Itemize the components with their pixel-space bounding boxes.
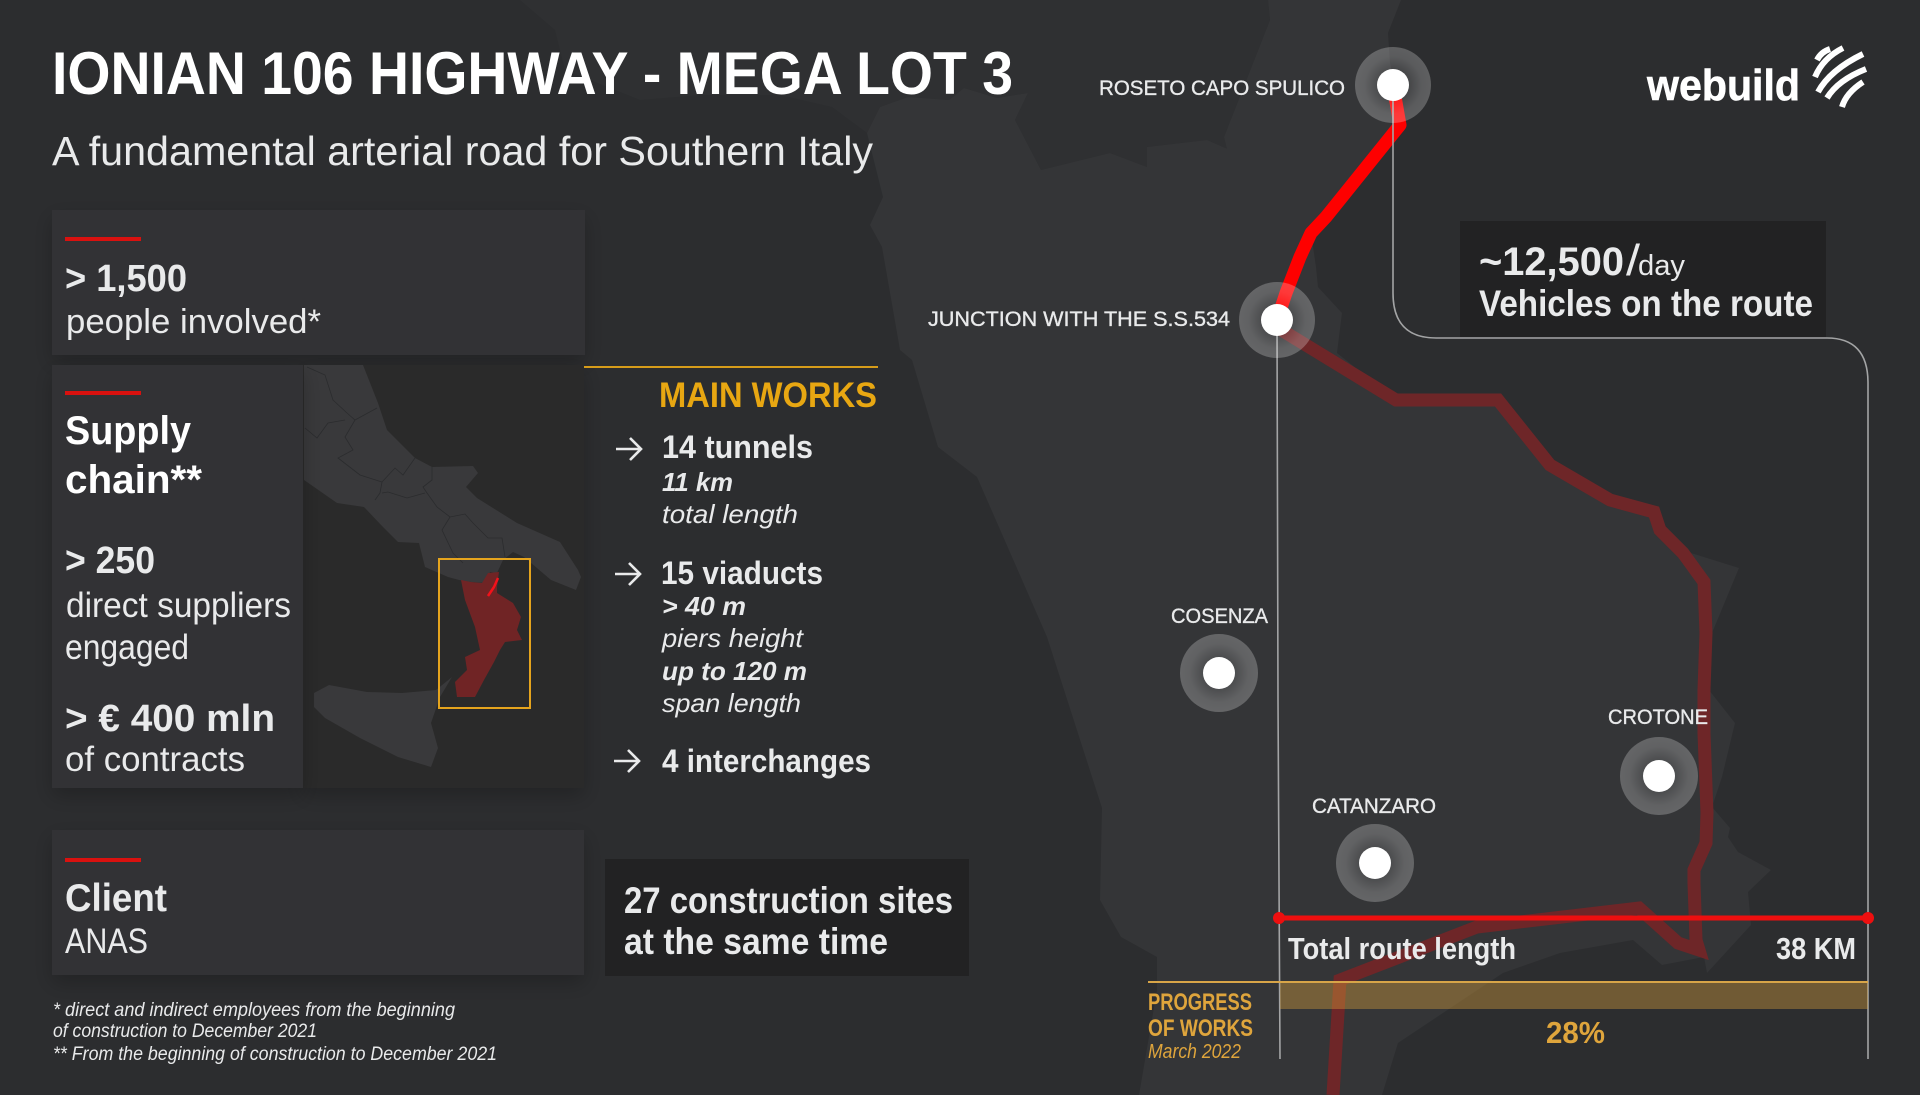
tunnels: 11 km (662, 467, 733, 497)
panel: supply chain text: of contracts (65, 740, 245, 779)
panel: supply chain text: chain** (65, 458, 202, 502)
callout: construction sites (605, 859, 969, 976)
tunnels: 14 tunnels (662, 429, 813, 465)
callout: construction sites: at the same time (624, 921, 888, 962)
subtitle: A fundamental arterial road for Southern Italy (52, 128, 873, 174)
route: bright section (1277, 85, 1400, 320)
viaducts: > 40 m (662, 591, 746, 621)
label: Crotone: CROTONE (1608, 706, 1708, 729)
connector line: route length (1393, 85, 1868, 1059)
callout: vehicles: ~12,500 (1479, 240, 1624, 284)
icon: arrow (615, 563, 640, 585)
callout: vehicles: / (1626, 236, 1641, 285)
label: Cosenza: COSENZA (1171, 605, 1268, 628)
viaducts: up to 120 m (662, 656, 807, 686)
panel: supply chain text: direct suppliers (66, 586, 291, 625)
footnotes (53, 1000, 497, 1065)
logo: webuild: webuild (1646, 61, 1800, 110)
mini map: highlight box (439, 559, 530, 708)
callout: construction sites: 27 construction sites (624, 880, 953, 921)
tunnels (662, 429, 813, 529)
panel: people involved (52, 210, 585, 355)
label: Roseto Capo Spulico: ROSETO CAPO SPULICO (1099, 77, 1345, 100)
mini map: Calabria (455, 572, 522, 697)
panel: supply chain text: > € 400 mln (65, 698, 275, 740)
icon: webuild globe stripes (1815, 48, 1866, 107)
marker: Catanzaro (1336, 824, 1414, 902)
marker: Roseto Capo Spulico (1355, 47, 1431, 123)
mini map: Sicily (314, 677, 452, 767)
panel: supply chain text (52, 365, 303, 788)
panel: supply chain text: > 250 (65, 540, 155, 582)
progress of works: 28% (1546, 1015, 1605, 1050)
label: Catanzaro: CATANZARO (1312, 795, 1436, 818)
panel: people involved: people involved* (66, 303, 321, 341)
callout: vehicles: day (1638, 250, 1685, 282)
panel: client (52, 830, 584, 975)
viaducts: piers height (661, 623, 805, 653)
panel: supply chain text: Supply (65, 409, 192, 453)
footnotes: * direct and indirect employees from the beginning (53, 1000, 455, 1021)
viaducts: span length (662, 688, 801, 718)
background map: Calabria (867, 0, 1771, 1095)
icon: arrow (614, 750, 639, 772)
tunnels: total length (662, 499, 798, 529)
total route length bar: Total route length (1288, 931, 1516, 966)
icon: arrow (616, 438, 641, 460)
footnotes: ** From the beginning of construction to December 2021 (53, 1044, 497, 1065)
mini map: region borders (305, 367, 505, 563)
panel: supply chain text: engaged (65, 628, 189, 667)
footnotes: of construction to December 2021 (53, 1021, 317, 1042)
viaducts (661, 555, 823, 718)
mini map: southern Italy (304, 365, 581, 590)
background map: neighbouring regions (520, 0, 1270, 170)
heading: main works: MAIN WORKS (659, 376, 877, 415)
panel: people involved: > 1,500 (65, 258, 187, 300)
label: junction: JUNCTION WITH THE S.S.534 (928, 308, 1230, 331)
marker: Crotone (1620, 737, 1698, 815)
interchanges: 4 interchanges (662, 743, 871, 779)
route: dark section (1278, 328, 1707, 1095)
panel: client: ANAS (65, 922, 148, 961)
marker: junction (1239, 282, 1315, 358)
panel: client: Client (65, 877, 167, 920)
connector line: left end (1277, 320, 1280, 1059)
viaducts: 15 viaducts (661, 555, 823, 591)
progress of works: PROGRESS (1148, 989, 1252, 1016)
progress of works: OF WORKS (1148, 1015, 1253, 1042)
main works (584, 366, 878, 779)
progress of works (1148, 981, 1868, 1063)
mini map: route (488, 578, 498, 596)
title: IONIAN 106 HIGHWAY - MEGA LOT 3 (52, 40, 1013, 107)
logo: webuild (1646, 48, 1866, 110)
panel: supply chain map (303, 365, 584, 788)
marker: Cosenza (1180, 634, 1258, 712)
total route length bar: 38 KM (1776, 931, 1856, 966)
callout: vehicles (1460, 221, 1826, 337)
progress of works: March 2022 (1148, 1041, 1241, 1063)
callout: vehicles: Vehicles on the route (1479, 283, 1813, 324)
total route length bar (1273, 912, 1874, 966)
